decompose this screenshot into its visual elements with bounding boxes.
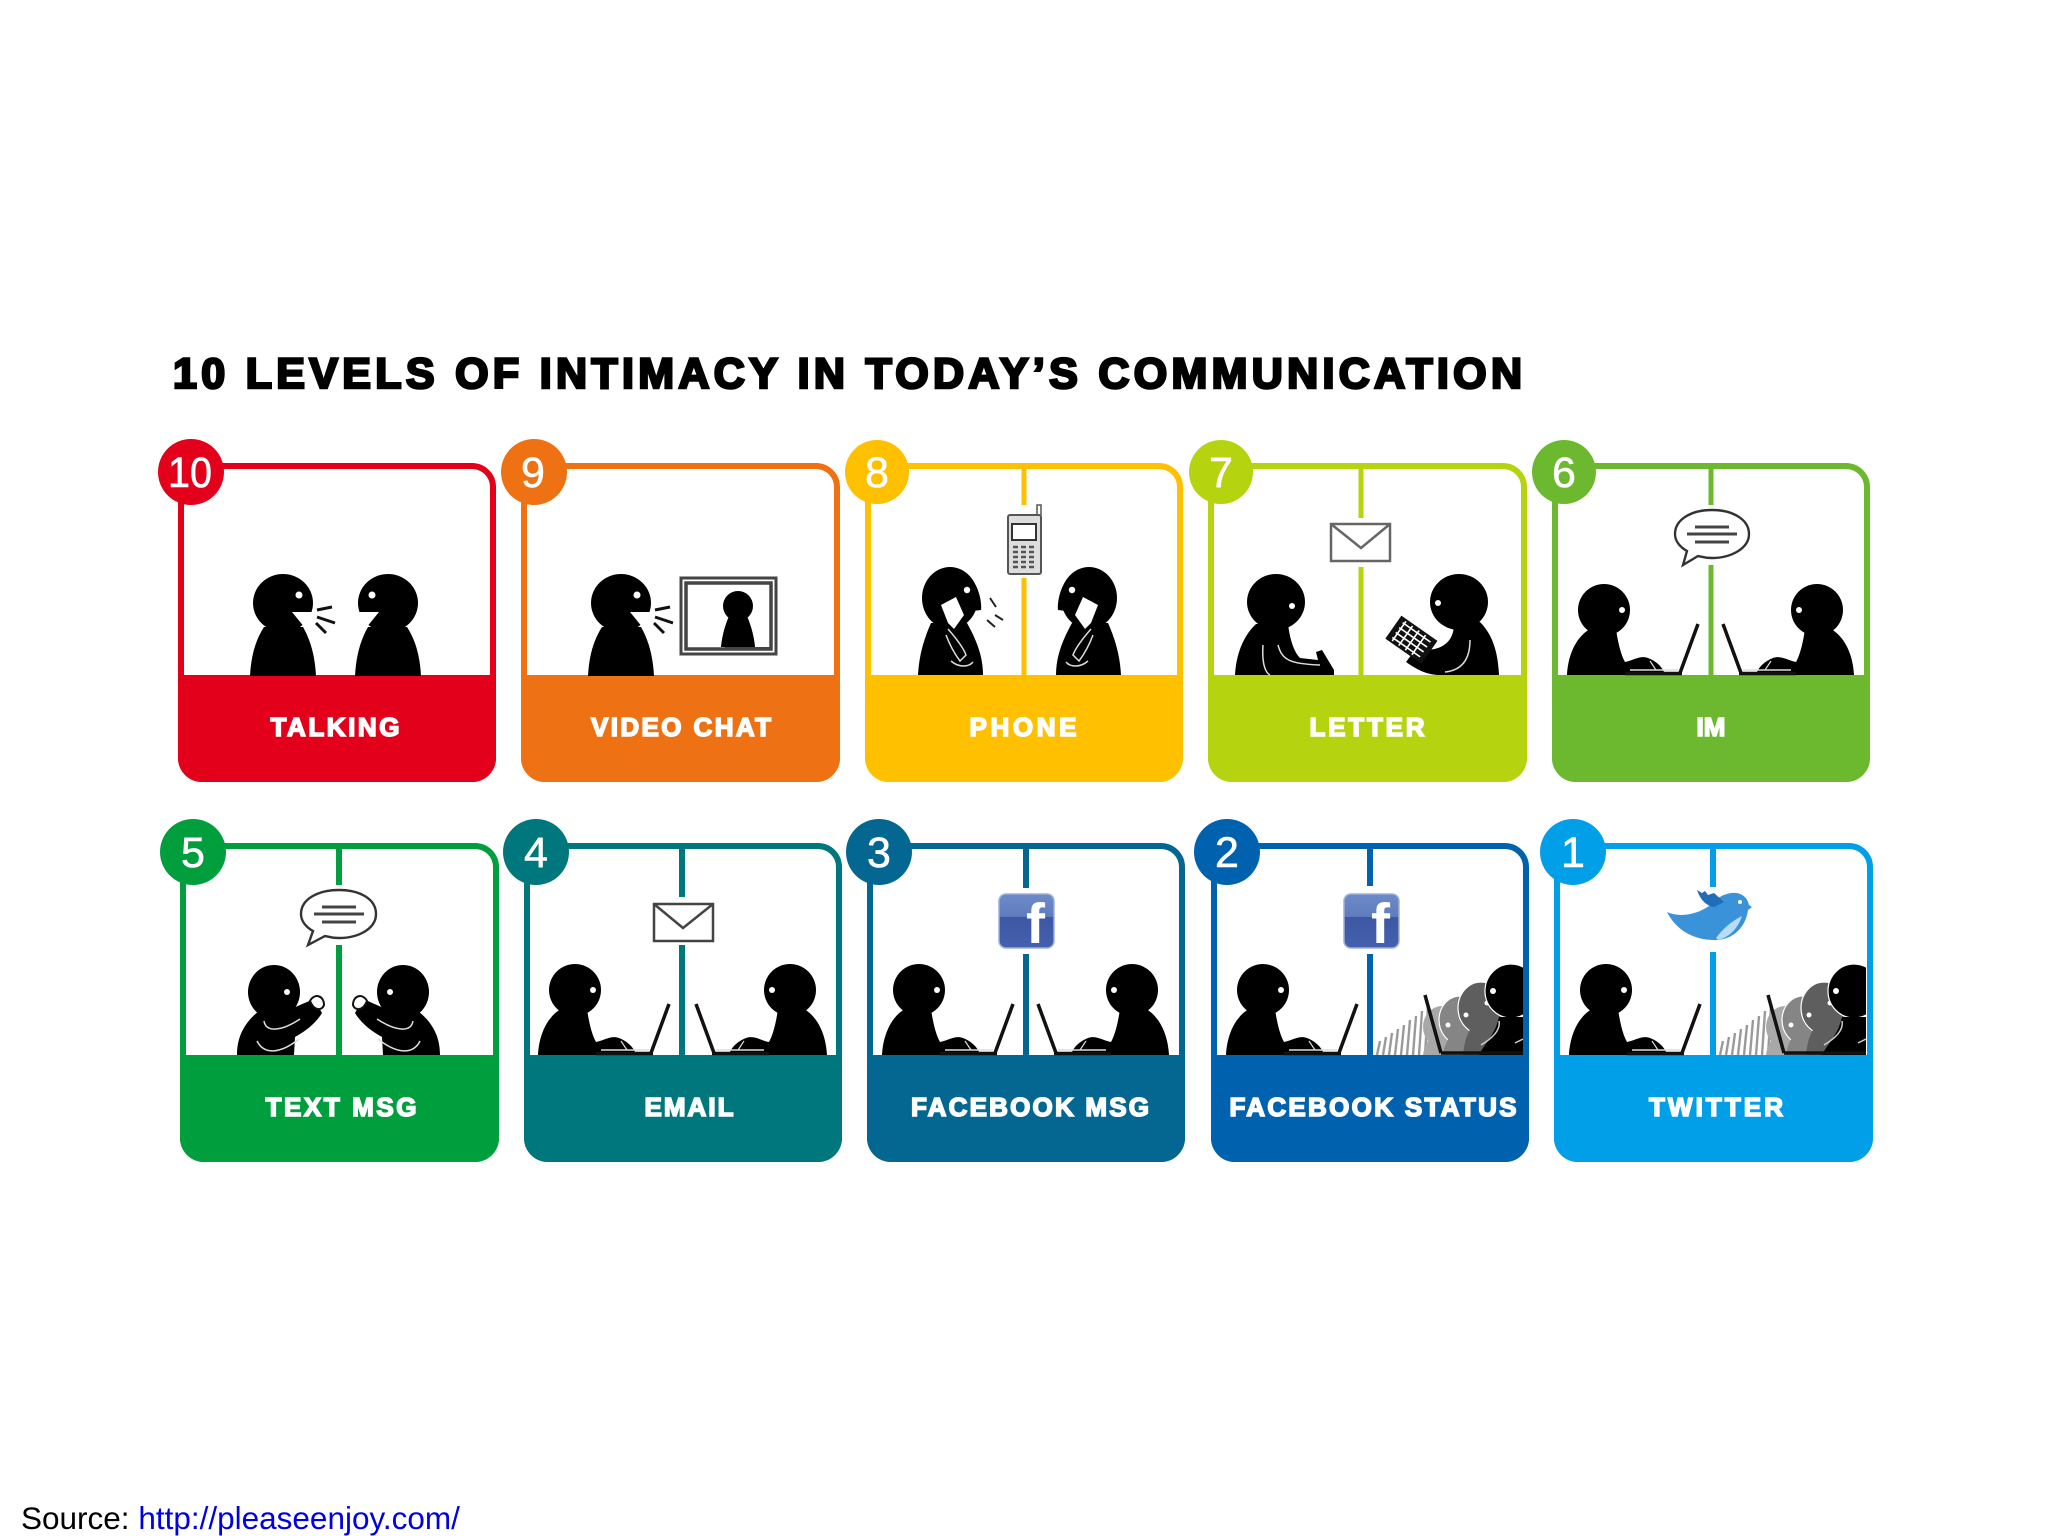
level number: 5 — [181, 829, 205, 877]
person on laptop — [1226, 964, 1357, 1055]
panel: letter — [1189, 440, 1527, 782]
panel: twitter — [1540, 819, 1884, 1162]
level number: 4 — [524, 829, 548, 877]
label: LETTER — [1310, 712, 1425, 742]
label band — [867, 1055, 1185, 1162]
facebook icon — [999, 892, 1054, 956]
envelope icon — [654, 904, 713, 941]
level number — [1189, 440, 1253, 504]
card frame — [870, 846, 1182, 1159]
label band — [1552, 675, 1870, 782]
level number — [1194, 819, 1260, 885]
level number: 7 — [1209, 449, 1233, 497]
card frame — [527, 846, 839, 1159]
label: EMAIL — [644, 1092, 734, 1122]
envelope icon — [1331, 524, 1390, 561]
person repeating posts — [1377, 964, 1541, 1055]
people talking — [250, 574, 421, 676]
level number — [503, 819, 569, 885]
level number — [1540, 819, 1606, 885]
label band — [1554, 1055, 1873, 1162]
level number: 8 — [865, 449, 889, 497]
speech bubble icon — [1675, 510, 1749, 565]
source line: Source: http://pleaseenjoy.com/ — [21, 1500, 460, 1536]
label: TWITTER — [1649, 1092, 1783, 1122]
label band — [524, 1055, 842, 1162]
card frame — [1557, 846, 1870, 1159]
card frame — [1214, 846, 1526, 1159]
person talking — [588, 574, 673, 676]
label band — [1208, 675, 1527, 782]
label: IM — [1697, 712, 1725, 742]
panel: phone — [845, 440, 1183, 782]
people on laptops — [882, 964, 1169, 1055]
panel: email — [503, 819, 842, 1162]
level number: 9 — [521, 449, 545, 497]
level number: 6 — [1552, 449, 1576, 497]
divider — [1367, 846, 1373, 1055]
card frame — [1555, 466, 1867, 779]
label band — [180, 1055, 499, 1162]
label: VIDEO CHAT — [591, 712, 771, 742]
divider — [1358, 466, 1364, 675]
card frame — [524, 466, 837, 779]
panel: video chat — [501, 439, 840, 782]
level number: 10 — [168, 449, 212, 497]
level number — [845, 440, 909, 504]
people texting — [237, 965, 440, 1055]
card frame — [1211, 466, 1524, 779]
label band — [521, 675, 840, 782]
divider — [679, 846, 685, 1055]
level number: 3 — [867, 829, 891, 877]
facebook icon: f — [1026, 892, 1046, 956]
person reading — [1385, 574, 1499, 675]
people on the phone — [918, 567, 1121, 675]
panel: facebook message — [846, 819, 1185, 1162]
level number: 1 — [1561, 829, 1585, 877]
people on laptops — [538, 964, 827, 1055]
label band — [178, 675, 496, 782]
person on laptop — [1569, 964, 1700, 1055]
label: PHONE — [970, 712, 1076, 742]
label band — [865, 675, 1183, 782]
speech bubble icon — [301, 890, 376, 945]
level number — [158, 439, 224, 505]
label: TEXT MSG — [266, 1092, 416, 1122]
title: 10 LEVELS OF INTIMACY IN TODAY’S COMMUNICATION — [173, 350, 1522, 398]
label band — [1211, 1055, 1529, 1162]
divider — [1710, 846, 1716, 1055]
panel: facebook status — [1194, 819, 1541, 1162]
panel: talking — [158, 439, 496, 782]
facebook icon — [1344, 892, 1399, 956]
label: FACEBOOK STATUS — [1230, 1092, 1516, 1122]
level number — [1532, 440, 1596, 504]
people on laptops — [1567, 584, 1854, 675]
mobile phone icon — [1008, 505, 1041, 574]
divider — [336, 846, 342, 1055]
card frame — [183, 846, 496, 1159]
divider — [1708, 466, 1714, 675]
label: FACEBOOK MSG — [911, 1092, 1149, 1122]
divider — [1022, 466, 1026, 675]
panel: text message — [160, 819, 499, 1162]
divider — [1023, 846, 1029, 1055]
panel: instant message — [1532, 440, 1870, 782]
level number — [501, 439, 567, 505]
person repeating posts — [1720, 964, 1884, 1055]
person writing — [1235, 574, 1334, 675]
level number — [160, 819, 226, 885]
level number: 2 — [1215, 829, 1239, 877]
video screen — [681, 578, 776, 654]
card frame — [868, 466, 1180, 779]
twitter bird icon — [1667, 890, 1752, 940]
label: TALKING — [270, 712, 400, 742]
level number — [846, 819, 912, 885]
facebook icon: f — [1371, 892, 1391, 956]
card frame — [181, 466, 493, 779]
